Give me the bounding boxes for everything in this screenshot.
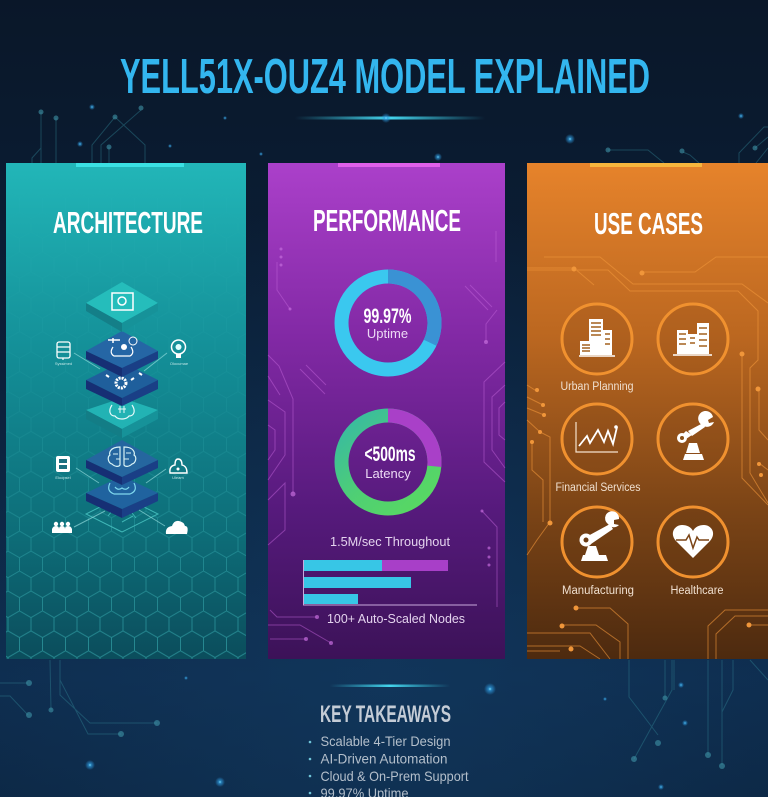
icon: bulb gear: Olocumae: [170, 361, 189, 366]
title divider glow: [295, 113, 485, 123]
label: manufacturing: Manufacturing: [562, 585, 634, 597]
icon: device: Eloopsel: [55, 475, 71, 480]
label: urban planning: Urban Planning: [560, 381, 634, 393]
panel circuit nodes: [530, 266, 763, 652]
icon: bulb gear: [170, 340, 189, 366]
layer stack: [86, 282, 158, 532]
panel circuit traces: [527, 257, 768, 659]
panel circuit traces: [268, 231, 505, 643]
layer 2: [86, 331, 158, 377]
heading: performance: PERFORMANCE: [313, 203, 461, 238]
takeaways divider glow: [330, 684, 450, 687]
connector lines: [74, 353, 167, 527]
icon: server: Syssimed: [55, 361, 72, 366]
icon: small cloud: Ulearn: [172, 475, 184, 480]
icon: manufacturing robot: [562, 507, 632, 577]
icon: people: [52, 522, 72, 533]
icon: urban planning: [562, 304, 632, 374]
value: uptime: 99.97%: [364, 305, 412, 328]
label: latency: Latency: [365, 466, 411, 481]
list: key takeaways: AI-Driven Automation: [320, 750, 448, 766]
label: financial services: Financial Services: [556, 482, 641, 494]
icon: server: [55, 342, 72, 366]
list: key takeaways: Scalable 4-Tier Design: [320, 733, 450, 749]
base circuit outline: [86, 505, 158, 532]
background sparkles: [77, 104, 744, 790]
panel: performance: [268, 163, 505, 659]
icon: robot wrench: [658, 404, 728, 474]
label: throughput: 1.5M/sec Throughout: [330, 534, 450, 549]
chart: throughput bars: [304, 560, 477, 605]
icon: city buildings: [658, 304, 728, 374]
panel circuit nodes: [280, 248, 490, 645]
layer 1: [86, 282, 158, 332]
icon: small cloud: [170, 459, 187, 480]
layer 6: [86, 476, 158, 518]
icon: cloud: [166, 521, 188, 534]
list: key takeaways: Cloud & On-Prem Support: [320, 768, 469, 784]
heading: use cases: USE CASES: [594, 206, 703, 241]
panel: use cases: [527, 163, 768, 659]
label: uptime: Uptime: [367, 326, 408, 341]
chart: latency donut: [342, 416, 434, 508]
background circuit nodes: [26, 106, 758, 769]
layer 3: [86, 362, 158, 406]
heading: key takeaways: KEY TAKEAWAYS: [320, 701, 451, 728]
icon: heartbeat: [658, 507, 728, 577]
layer 4: [86, 398, 158, 438]
heading: architecture: ARCHITECTURE: [53, 205, 203, 240]
label: nodes: 100+ Auto-Scaled Nodes: [327, 611, 465, 626]
chart: uptime donut: [342, 276, 434, 370]
icon: financial chart: [562, 404, 632, 474]
icon: device: [55, 456, 71, 480]
layer 5: [86, 440, 158, 485]
value: latency: <500ms: [364, 443, 416, 466]
label: healthcare: Healthcare: [670, 585, 724, 597]
panel: architecture: [6, 163, 246, 659]
list: key takeaways: [309, 733, 469, 797]
